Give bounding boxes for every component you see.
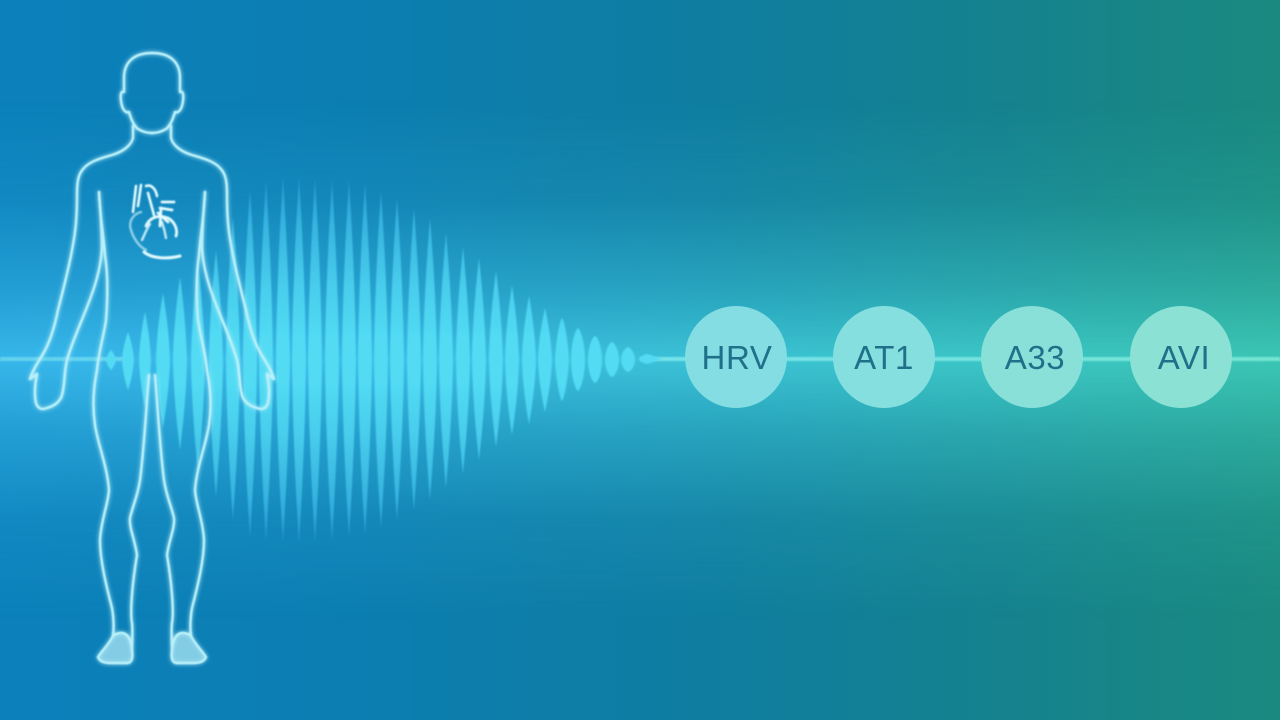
left foot: [98, 633, 132, 663]
metric node: A33: A33: [1005, 339, 1065, 376]
metric node: AT1: [833, 306, 935, 408]
metric node: HRV: HRV: [702, 339, 772, 376]
metric node: HRV: [685, 306, 787, 408]
signal baseline: [0, 357, 1280, 361]
metric node: A33: [981, 306, 1083, 408]
head and left half of the body: [30, 53, 152, 663]
metric node: AVI: [1130, 306, 1232, 408]
metric node: AVI: AVI: [1158, 339, 1210, 376]
waveform: [106, 176, 661, 544]
icon: heart: [130, 185, 180, 258]
right half of the body: [152, 53, 274, 663]
right foot: [172, 633, 206, 663]
human body outline: [30, 53, 274, 663]
metric node: AT1: AT1: [854, 339, 914, 376]
